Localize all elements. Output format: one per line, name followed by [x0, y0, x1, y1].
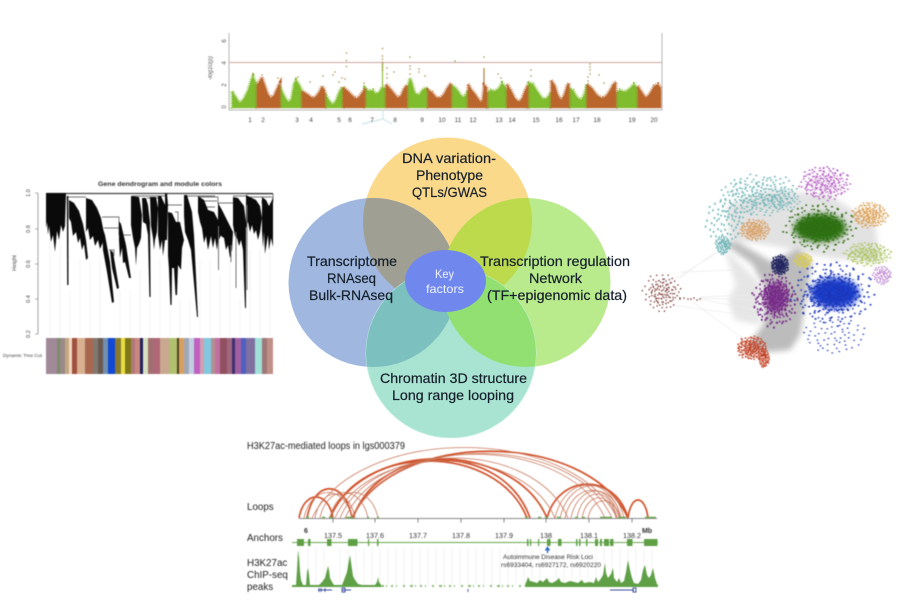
chromosome labels: 5 [337, 117, 341, 124]
light edge fan [724, 248, 762, 325]
chromosome labels: 4 [309, 117, 313, 124]
chromosome labels: 20 [650, 117, 658, 124]
genomic axis [299, 518, 657, 522]
cluster: orange left [734, 215, 776, 245]
faint edges from outlying cluster [670, 245, 765, 340]
genomic coordinates: 137.8 [452, 531, 470, 540]
row labels: H3K27ac [247, 558, 287, 569]
chromosome bars [232, 76, 661, 108]
label: transcriptome [307, 253, 397, 303]
y axis labels: 0 [222, 105, 228, 109]
cluster: orange upper right [841, 194, 899, 235]
axis labels: 0.2 [26, 330, 32, 338]
genomic coordinates: 6 [304, 528, 308, 535]
chromosome labels: 17 [572, 117, 580, 124]
cluster: violet right [871, 265, 892, 286]
strip label: Dynamic Tree Cut [3, 353, 43, 358]
label: transcriptome: RNAseq [327, 270, 376, 286]
genomic coordinates: 137.9 [495, 531, 513, 540]
chromosome labels: 12 [469, 117, 477, 124]
risk loci annotation [501, 554, 602, 569]
genomic coordinates: Mb [642, 528, 652, 535]
label: DNA variation [402, 150, 496, 200]
cluster: dark green [777, 198, 863, 255]
plot axes [229, 33, 662, 110]
axis labels: 1.0 [26, 189, 32, 197]
chromosome labels: 11 [455, 117, 462, 124]
circle: chromatin [366, 268, 536, 438]
module colour strip [46, 338, 273, 374]
cluster: pink purple [795, 162, 855, 203]
cluster: brown [638, 270, 700, 316]
panel title: H3K27ac-mediated loops in lgs000379 [247, 441, 405, 452]
chromosome labels: 7 [370, 117, 374, 124]
row labels: Loops [247, 502, 274, 513]
y axis labels: 4 [222, 61, 228, 65]
genomic coordinates: 138.2 [623, 531, 641, 540]
label: transcription regulation [480, 253, 630, 303]
chromosome labels: 19 [628, 117, 636, 124]
circle: DNA variation [363, 138, 532, 306]
chromosome labels: 2 [261, 117, 265, 124]
row labels: ChIP-seq [247, 570, 288, 581]
chromosome labels: 18 [593, 117, 601, 124]
circle: transcription regulation [442, 198, 610, 367]
gene models [318, 588, 636, 592]
chromosome labels: 9 [420, 117, 424, 124]
label: transcription regulation: Network [529, 270, 583, 286]
tall orange column [483, 68, 485, 90]
merge brackets [68, 194, 273, 256]
center ellipse: key factors [405, 250, 486, 312]
anchor track [292, 539, 658, 546]
label: DNA variation: Phenotype [416, 167, 483, 183]
y axis labels: -log10(p) [208, 56, 214, 80]
row labels: peaks [247, 582, 273, 593]
genomic coordinates: 138 [540, 531, 552, 540]
label: transcriptome: Bulk-RNAseq [309, 287, 393, 303]
overlap: teal and green [447, 275, 536, 367]
title: Gene dendrogram and module colors [98, 181, 222, 188]
label: key factors: Key [435, 267, 454, 281]
genomic coordinates: 138.1 [580, 531, 598, 540]
axis labels: 0.8 [26, 225, 32, 233]
risk loci arrow [546, 548, 550, 553]
dendrogram panel [3, 181, 273, 374]
top merge lines [46, 192, 273, 194]
genomic coordinates: 137.6 [366, 531, 384, 540]
cluster: blue [784, 254, 882, 359]
y axis labels [208, 39, 228, 109]
label: chromatin: Long range looping [392, 387, 514, 403]
green chromosomes [232, 76, 638, 108]
chromosome labels: 1 [248, 117, 252, 124]
chromosome labels: 3 [295, 117, 299, 124]
low level peak signal [381, 585, 525, 587]
label: DNA variation: QTLs/GWAS [412, 184, 487, 200]
chromosome labels: 8 [393, 117, 397, 124]
axis labels [12, 189, 32, 338]
overlap: yellow and green [448, 198, 532, 286]
chromosome labels: 6 [348, 117, 352, 124]
faint connector tree [362, 110, 392, 124]
chromosome labels [248, 117, 658, 124]
label: transcription regulation: Transcription regulation [480, 253, 630, 269]
genomic coordinates: 137.7 [409, 531, 427, 540]
cluster: red [727, 329, 777, 370]
risk loci annotation: rs6933404, rs6927172, rs6920220 [501, 562, 602, 569]
grey long branches [218, 205, 247, 290]
track guides [300, 548, 652, 586]
axis [35, 193, 38, 334]
axis labels: 0.4 [26, 295, 32, 303]
axis labels: Height [12, 255, 18, 271]
chromosome labels: 15 [532, 117, 540, 124]
label: transcriptome: Transcriptome [307, 253, 397, 269]
y axis labels: 2 [222, 83, 228, 87]
tall signal columns [382, 62, 384, 90]
axis labels: 0.6 [26, 260, 32, 268]
chromosome labels: 13 [495, 117, 503, 124]
loop anchors marks [306, 516, 656, 518]
genomic coordinates: 137.5 [324, 531, 342, 540]
overlap: yellow and blue [363, 198, 450, 288]
row labels [247, 502, 288, 593]
dendrogram branches [46, 193, 273, 317]
cluster: olive [834, 237, 900, 271]
venn diagram [288, 138, 630, 438]
risk loci annotation: Autoimmune Disease Risk Loci [503, 554, 593, 561]
upper light edges [728, 190, 880, 262]
row labels: Anchors [247, 533, 283, 544]
overlap: teal and blue [366, 282, 450, 367]
orange chromosomes [257, 77, 661, 108]
significant SNP points [253, 48, 604, 85]
chip-seq peaks [292, 550, 658, 587]
chromosome labels: 14 [508, 117, 516, 124]
y axis labels: 6 [222, 39, 228, 43]
arc diagram [299, 448, 648, 518]
chromosome labels: 10 [438, 117, 446, 124]
label: chromatin [380, 370, 527, 403]
genomic coordinates [304, 528, 652, 540]
circle: transcriptome [288, 198, 458, 367]
manhattan plot [208, 33, 662, 124]
chromosome labels: 16 [555, 117, 563, 124]
label: transcription regulation: (TF+epigenomic data) [487, 287, 627, 303]
faint leaf guides [50, 240, 270, 336]
label: key factors [426, 267, 464, 296]
cluster: purple [740, 257, 811, 342]
network graph [638, 162, 900, 370]
loops panel [247, 441, 658, 593]
cluster: navy [765, 248, 795, 281]
grey edge bundles [724, 241, 812, 352]
label: DNA variation: DNA variation- [402, 150, 496, 166]
label: chromatin: Chromatin 3D structure [380, 370, 527, 386]
cluster: teal [706, 169, 805, 257]
label: key factors: factors [426, 282, 464, 296]
cluster: yellow [794, 253, 812, 267]
threshold line [229, 62, 662, 64]
